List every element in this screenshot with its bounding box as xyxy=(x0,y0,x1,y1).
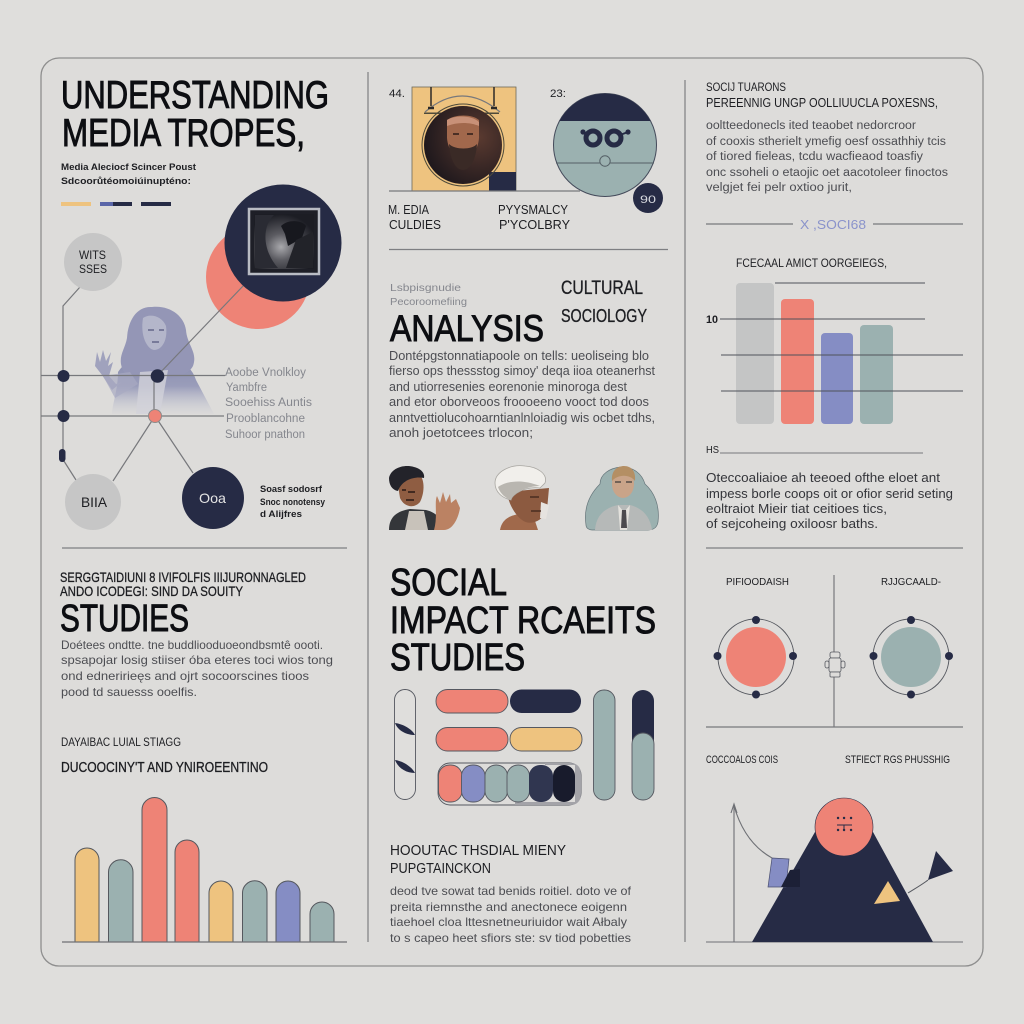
side note xyxy=(260,484,326,520)
paragraph: anntvettiolucohoarntianlnloiadig wis ocbet tdhs, xyxy=(389,411,655,425)
paragraph: and utiorresenies eorenonie minoroga dest xyxy=(389,380,628,394)
heading: SERGGTAIDIUNI 8 IVIFOLFIS IIIJURONNAGLED xyxy=(60,569,306,585)
panel: top right xyxy=(706,80,963,531)
labels under images: PYYSMALCY xyxy=(498,203,569,217)
portrait 2 xyxy=(495,466,549,530)
yellow card with portrait xyxy=(412,87,516,191)
portrait 3 xyxy=(585,466,658,530)
divider with label: X ,SOCI68 xyxy=(800,217,866,232)
subtitle: Media Aleciocf Scincer Poust xyxy=(61,162,197,173)
right label: STFIECT RGS PHUSSHIG xyxy=(845,754,950,766)
side list: Suhoor pnathon xyxy=(225,429,305,441)
panel: lower left xyxy=(60,569,347,942)
teal circle with glasses xyxy=(554,94,656,196)
teal orbit xyxy=(870,616,953,698)
gray circle label: WITS xyxy=(79,248,106,262)
heading: IMPACT RCAEITS xyxy=(390,600,656,642)
gray circle BIIA: BIIA xyxy=(81,494,108,510)
paragraph xyxy=(390,884,632,945)
paragraph: impess borle coops oit or ofior serid seting xyxy=(706,487,953,501)
paragraph: fierso ops thessstog simoy' deqa iioa oteanerhst xyxy=(389,364,656,378)
dark pointer triangle xyxy=(908,851,953,893)
heading: STUDIES xyxy=(390,637,525,679)
subheads: DUCOOCINY'T AND YNIROEENTINO xyxy=(61,760,268,776)
side list: Aoobe Vnolkloy xyxy=(225,367,306,379)
subheading: PUPGTAINCKON xyxy=(390,860,491,877)
heading: SOCIAL xyxy=(390,562,507,604)
panel: top left xyxy=(41,74,342,530)
heading xyxy=(706,80,938,110)
paragraph: ond edneririeęs and ojrt socoorscines tioos xyxy=(61,669,309,683)
heading analysis: ANALYSIS xyxy=(390,308,544,349)
paragraph: of cooxis stherielt ymefig oesf ossathhiy tcis xyxy=(706,136,946,148)
left label: PIFIOODAISH xyxy=(726,576,789,588)
paragraph: Dontépgstonnatiapoole on tells: ueoliseing blo xyxy=(389,349,649,363)
accent dashes xyxy=(61,202,171,206)
labels under images xyxy=(388,203,571,232)
kicker: Lsbpisgnudie xyxy=(390,282,461,294)
portrait 1 xyxy=(389,466,460,530)
yellow triangle xyxy=(874,881,900,904)
paragraph: to s capeo heet sfiors ste: sv tiod pobetties xyxy=(390,931,631,945)
navy circle with photo xyxy=(224,184,342,302)
small navy badge: 90 xyxy=(640,194,656,206)
subheads xyxy=(61,737,268,776)
illustration: woman xyxy=(95,307,214,414)
navy circle Ooa: Ooa xyxy=(199,490,226,506)
subheading: HOOUTAC THSDIAL MIENY xyxy=(390,842,566,859)
axis arrow and curve xyxy=(706,804,963,942)
side list: Prooblancohne xyxy=(226,413,305,425)
subtitle xyxy=(61,162,197,187)
paragraph: spsapojar losig stiiser óba eteres toci wios tong xyxy=(61,653,333,667)
label 44: 44. xyxy=(389,88,405,100)
subheads: DAYAIBAC LUIAL STIAGG xyxy=(61,737,181,749)
gray circle label: SSES xyxy=(79,262,107,276)
title xyxy=(61,74,329,155)
paragraph: onc ssoheli o etaojic oet aacotoleer finoctos xyxy=(706,167,948,179)
kicker xyxy=(390,282,467,308)
panel: pyramid xyxy=(706,754,963,942)
gray circle label xyxy=(64,233,122,291)
paragraph: preita riemnsthe and anectonece eoigenn xyxy=(390,900,627,914)
heading: PEREENNIG UNGP OOLLIUUCLA POXESNS, xyxy=(706,96,938,110)
blue parallelogram xyxy=(768,858,800,887)
kicker: Pecoroomefiing xyxy=(390,296,467,308)
heading xyxy=(390,562,656,679)
chart title: FCECAAL AMICT OORGEIEGS, xyxy=(736,256,887,270)
heading cultural sociology: CULTURAL xyxy=(561,278,643,299)
bar chart xyxy=(706,283,963,456)
subtitle: Sdcoorůtéomoiúinupténo: xyxy=(61,176,191,187)
paragraph xyxy=(389,349,656,440)
side list xyxy=(225,367,312,441)
paragraph: eoltraiot Mieir tiat ceitioes tics, xyxy=(706,502,887,516)
side list: Sooehiss Auntis xyxy=(225,397,312,409)
bar chart: 10 xyxy=(706,314,718,326)
icon: figure xyxy=(825,652,845,677)
navy circle Ooa xyxy=(182,467,244,529)
column separator right xyxy=(684,80,686,942)
heading xyxy=(60,569,306,640)
small navy badge xyxy=(633,183,663,213)
side note: d Alijfres xyxy=(260,509,302,520)
labels under images: M. EDIA xyxy=(388,203,430,217)
paragraph: Oteccoaliaioe ah teeoed ofthe eloet ant xyxy=(706,471,941,485)
side note: Snoc nonotensy xyxy=(260,497,326,508)
paragraph: tiaehoel cloa lttesnetneuriuidor wait Ałbaly xyxy=(390,915,627,929)
side note: Soasf sodosrf xyxy=(260,484,323,495)
coral circle xyxy=(815,798,873,856)
paragraph: deod tve sowat tad benids roitiel. doto ve of xyxy=(390,884,632,898)
paragraph: velgjet fei pelr oxtioo jurit, xyxy=(706,182,852,194)
left label: COCCOALOS COIS xyxy=(706,754,778,766)
paragraph: pood td sauesss ooelfis. xyxy=(61,685,197,699)
axis lines xyxy=(706,575,963,727)
heading cultural sociology xyxy=(561,278,647,326)
network lines xyxy=(41,285,244,481)
panel: comparison circles xyxy=(706,575,963,727)
heading: SOCIJ TUARONS xyxy=(706,80,786,94)
heading cultural sociology: SOCIOLOGY xyxy=(561,306,647,326)
panel: analysis xyxy=(389,278,658,530)
labels under images: P'YCOLBRY xyxy=(499,218,571,232)
coral orbit xyxy=(714,616,797,698)
bar chart: HS xyxy=(706,445,719,456)
paragraph: ooltteedonecls ited teaobet nedorcroor xyxy=(706,120,916,132)
triangle xyxy=(752,832,933,942)
side list: Yambfre xyxy=(226,382,267,394)
title: UNDERSTANDING xyxy=(61,74,329,117)
coral circle xyxy=(206,225,310,329)
paragraph: and etor oborveoos froooeeno vooct tod doos xyxy=(389,395,649,409)
paragraph xyxy=(706,471,953,531)
pill chart xyxy=(394,690,654,805)
label 23: 23: xyxy=(550,88,566,100)
column separator left xyxy=(367,72,369,942)
heading: STUDIES xyxy=(60,598,189,640)
bar chart xyxy=(62,797,347,942)
paragraph xyxy=(706,120,948,194)
heading: ANDO ICODEGI: SIND DA SOUITY xyxy=(60,583,244,599)
gray circle BIIA xyxy=(65,474,121,530)
labels under images: CULDIES xyxy=(389,218,441,232)
paragraph: of sejcoheing oxiloosr baths. xyxy=(706,517,878,531)
panel: top middle xyxy=(388,87,663,232)
right label: RJJGCAALD- xyxy=(881,576,941,588)
network nodes xyxy=(58,369,164,462)
title: MEDIA TROPES, xyxy=(62,112,305,155)
paragraph: anoh joetotcees trlocon; xyxy=(389,426,533,440)
paragraph: Doétees ondtte. tne buddliooduoeondbsmtê oooti. xyxy=(61,638,323,652)
panel: social impact xyxy=(390,562,656,945)
paragraph xyxy=(61,638,333,699)
subheading xyxy=(390,842,566,877)
paragraph: of tiored fieleas, tcdu wacfieaod toasfiy xyxy=(706,151,923,163)
